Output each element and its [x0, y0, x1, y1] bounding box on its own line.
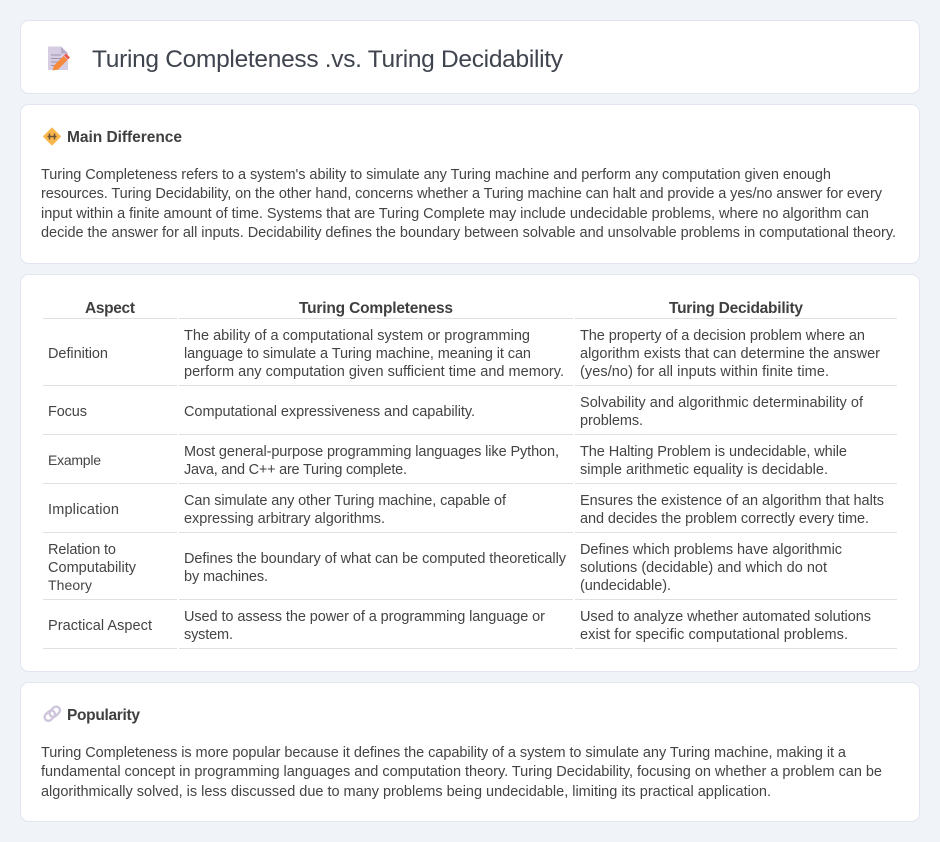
row: example	[43, 444, 897, 484]
row: definition: algorithm exists that can determine the answer	[580, 346, 880, 362]
text block: popularity: Turing Completeness is more popular because it defines the capability of a system to simulate any Turing machine, making it a	[41, 745, 847, 761]
table header: Aspect	[85, 300, 135, 317]
icon: document with pencil	[48, 46, 70, 70]
table header: Turing Decidability	[669, 300, 803, 317]
row: implication: expressing arbitrary algorithms.	[184, 511, 385, 527]
row: definition: The ability of a computational system or programming	[184, 328, 530, 344]
row: relation to computability theory: (undecidable).	[580, 578, 671, 594]
text block: popularity: fundamental concept in programming languages and computation theory. Turing Decidability, focusing on whether a problem can be	[41, 764, 882, 780]
row: example: Java, and C++ are Turing complete.	[184, 462, 407, 478]
row: implication: Can simulate any other Turing machine, capable of	[184, 493, 507, 509]
row: example: simple arithmetic equality is decidable.	[580, 462, 828, 478]
row: relation to computability theory: Theory	[48, 577, 92, 593]
row: definition	[43, 328, 897, 386]
row: practical aspect: Used to analyze whether automated solutions	[580, 609, 871, 625]
panel: comparison table	[20, 274, 920, 672]
title: Turing Completeness .vs. Turing Decidability	[92, 46, 564, 73]
row: definition: The property of a decision problem where an	[580, 328, 865, 344]
icon: chain link	[43, 705, 61, 722]
text block: main difference: Turing Completeness refers to a system's ability to simulate any Turing machine and perform any computation given enough	[41, 167, 831, 183]
row: relation to computability theory	[43, 542, 897, 600]
row: example: Most general-purpose programming languages like Python,	[184, 444, 559, 460]
panel: popularity	[20, 682, 920, 822]
row: practical aspect: Practical Aspect	[48, 618, 152, 634]
row: relation to computability theory: by machines.	[184, 569, 268, 585]
row: implication: and decides the problem correctly every time.	[580, 511, 869, 527]
text block: main difference	[41, 167, 896, 241]
row: relation to computability theory: Computability	[48, 560, 137, 576]
text block: popularity	[41, 745, 882, 800]
heading: main difference: Main Difference	[67, 129, 182, 146]
row: practical aspect: exist for specific computational problems.	[580, 627, 848, 643]
row: practical aspect: system.	[184, 627, 233, 643]
row: relation to computability theory: Defines the boundary of what can be computed theoretically	[184, 551, 567, 567]
row: implication: Ensures the existence of an algorithm that halts	[580, 493, 884, 509]
row: focus: Solvability and algorithmic determinability of	[580, 395, 864, 411]
row: example: The Halting Problem is undecidable, while	[580, 444, 847, 460]
row: definition: Definition	[48, 346, 108, 362]
row: relation to computability theory: Defines which problems have algorithmic	[580, 542, 842, 558]
row: focus: problems.	[580, 413, 643, 429]
row: example: Example	[48, 452, 101, 468]
row: definition: (yes/no) for all inputs within finite time.	[580, 364, 829, 380]
text block: main difference: input within a finite amount of time. Systems that are Turing Complete may include undecidable problems, where no algorithm can	[41, 206, 869, 222]
row: focus: Focus	[48, 404, 87, 420]
panel: main difference	[20, 104, 920, 264]
row: relation to computability theory: solutions (decidable) and which do not	[580, 560, 827, 576]
row: focus: Computational expressiveness and capability.	[184, 404, 475, 420]
panel: header	[20, 20, 920, 94]
row: implication: Implication	[48, 502, 119, 518]
row: practical aspect: Used to assess the power of a programming language or	[184, 609, 545, 625]
table header: Turing Completeness	[299, 300, 453, 317]
row: definition: perform any computation given sufficient time and memory.	[184, 364, 564, 380]
row: implication	[43, 493, 897, 533]
row: definition: language to simulate a Turing machine, meaning it can	[184, 346, 531, 362]
text block: main difference: resources. Turing Decidability, on the other hand, concerns whether a Turing machine can halt and provide a yes/no answer for every	[41, 186, 883, 202]
table header	[43, 300, 897, 319]
row: relation to computability theory: Relation to	[48, 542, 116, 558]
text block: main difference: decide the answer for all inputs. Decidability defines the boundary between solvable and unsolvable problems in computational theory.	[41, 225, 896, 241]
row: focus	[43, 395, 897, 435]
icon: warning diamond	[44, 128, 60, 145]
text block: popularity: algorithmically solved, is less discussed due to many problems being undecidable, limiting its practical application.	[41, 784, 771, 800]
heading: popularity: Popularity	[67, 707, 140, 724]
row: practical aspect	[43, 609, 897, 649]
